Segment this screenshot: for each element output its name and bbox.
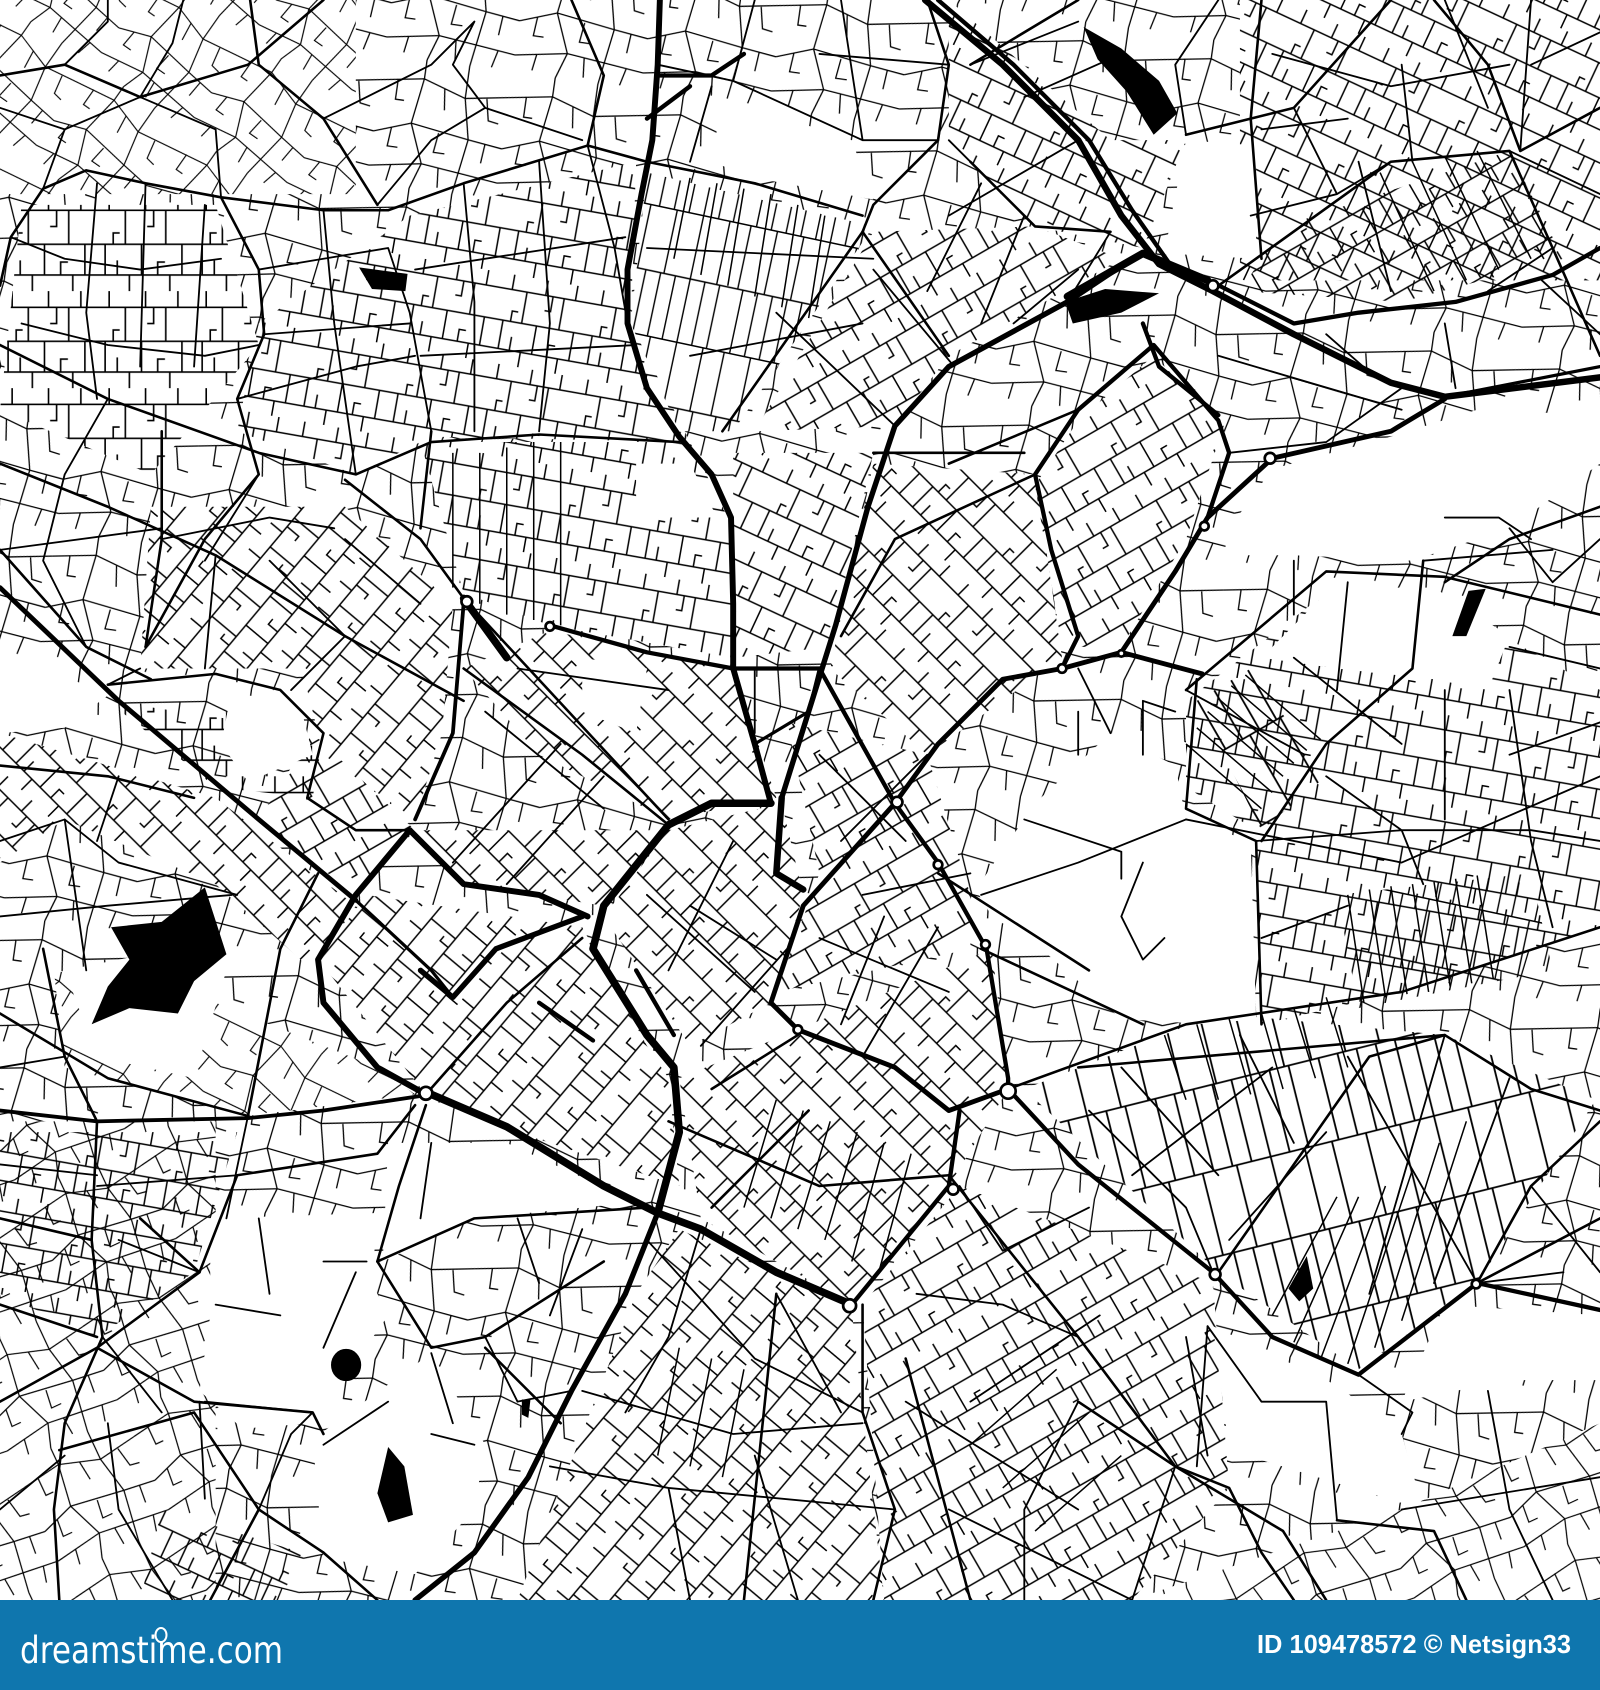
footer credit: ID 109478572 © Netsign33 [1257,1629,1571,1659]
terrace street strips [453,151,1531,1531]
lakes and water bodies [92,27,1486,1522]
roundabouts [419,280,1480,1312]
footer logo: dreamstime: dreamstime.com [20,1629,283,1672]
footer bar [0,1600,1600,1690]
